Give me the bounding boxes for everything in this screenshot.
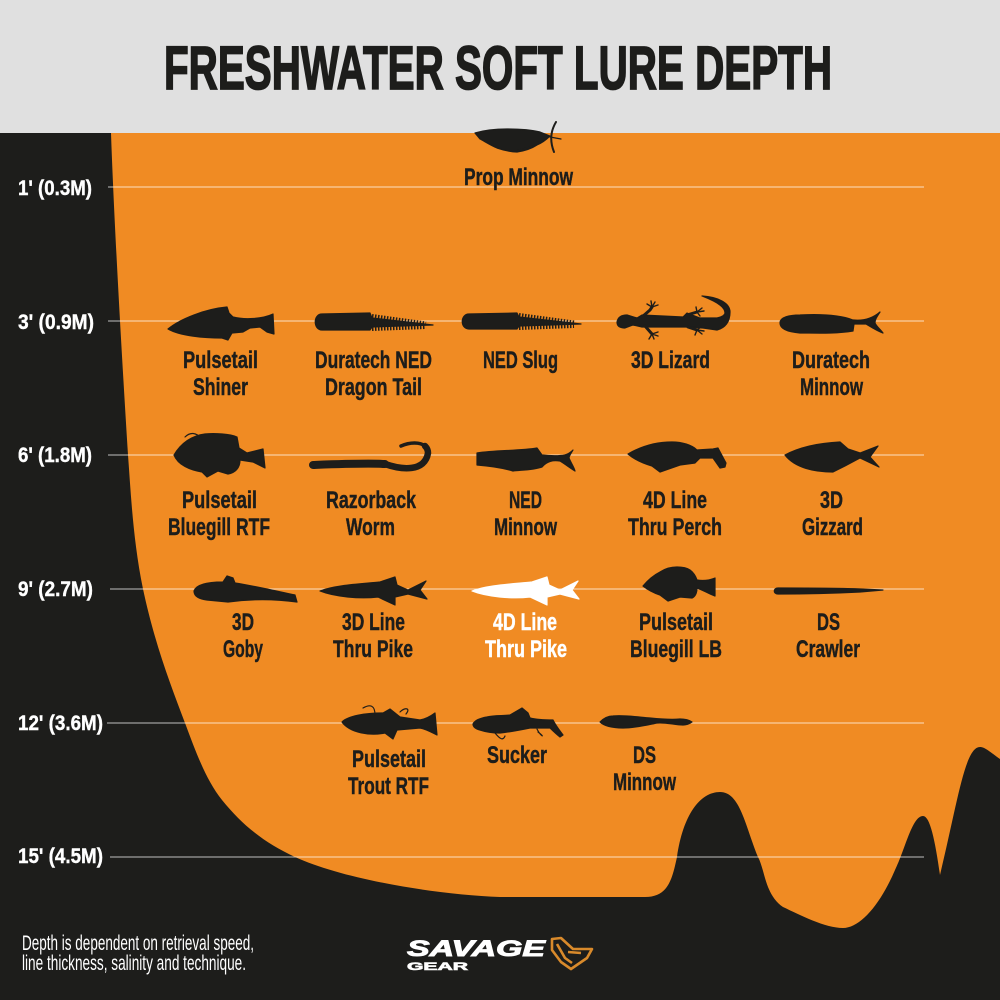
logo wordmark bbox=[407, 936, 547, 973]
label: Dragon Tail bbox=[325, 374, 422, 401]
lure: 4D Line Thru Perch bbox=[628, 442, 726, 541]
label: Pulsetail bbox=[639, 609, 713, 636]
lure: Duratech Minnow bbox=[780, 312, 883, 401]
logo: Savage Gear bbox=[407, 936, 592, 973]
depth 3 ft: 3' (0.9M) bbox=[18, 310, 94, 334]
lure: Pulsetail Shiner bbox=[168, 307, 274, 401]
label bbox=[494, 487, 557, 541]
lure: Pulsetail Trout RTF bbox=[342, 706, 437, 800]
icon: worm bbox=[313, 443, 428, 468]
label bbox=[326, 487, 416, 541]
depth 12 ft: 12' (3.6M) bbox=[18, 711, 103, 735]
label: Thru Pike bbox=[485, 636, 567, 663]
lure: 4D Line Thru Pike (highlighted) bbox=[472, 577, 579, 663]
lure: DS Minnow bbox=[600, 716, 692, 796]
icon: dragon tail bbox=[315, 313, 433, 330]
label bbox=[348, 746, 429, 800]
lure: NED Minnow bbox=[477, 448, 575, 541]
lure: 3D Gizzard bbox=[785, 442, 879, 541]
footnote bbox=[22, 932, 254, 975]
label: NED bbox=[509, 487, 542, 514]
label: 3D Line bbox=[342, 609, 405, 636]
label: Minnow bbox=[494, 514, 557, 541]
icon: prop minnow bbox=[475, 122, 561, 152]
label: Pulsetail bbox=[183, 347, 258, 374]
label: Crawler bbox=[796, 636, 860, 663]
label: Trout RTF bbox=[348, 773, 429, 800]
icon: pike bbox=[320, 577, 427, 605]
lure: Prop Minnow bbox=[464, 122, 573, 191]
footnote: line thickness, salinity and technique. bbox=[22, 952, 246, 975]
logo wordmark: GEAR bbox=[407, 961, 468, 973]
label: DS bbox=[817, 609, 840, 636]
icon: trout with hooks bbox=[342, 706, 437, 739]
label: 3D bbox=[232, 609, 254, 636]
label bbox=[223, 609, 263, 663]
depth 6 ft: 6' (1.8M) bbox=[18, 443, 92, 467]
icon: duratech minnow bbox=[780, 312, 883, 333]
label: Thru Perch bbox=[628, 514, 722, 541]
lure: NED Slug bbox=[462, 313, 581, 374]
orange water area with lake bed profile bbox=[111, 133, 1000, 928]
label: Duratech bbox=[792, 347, 870, 374]
label: 4D Line bbox=[643, 487, 707, 514]
logo emblem bbox=[552, 938, 592, 969]
label: Duratech NED bbox=[315, 347, 432, 374]
icon: lizard bbox=[617, 296, 730, 339]
icon: crawler bbox=[774, 588, 883, 594]
lure: DS Crawler bbox=[774, 588, 883, 663]
label bbox=[792, 347, 870, 401]
icon: perch bbox=[628, 442, 726, 472]
lure: 3D Goby bbox=[194, 576, 297, 663]
label: Worm bbox=[346, 514, 395, 541]
header band bbox=[0, 0, 1000, 133]
depth 15 ft: 15' (4.5M) bbox=[18, 844, 103, 868]
logo wordmark: SAVAGE bbox=[407, 936, 547, 961]
icon: sucker bbox=[473, 708, 563, 739]
label bbox=[630, 609, 722, 663]
label: 4D Line bbox=[493, 609, 557, 636]
label bbox=[485, 609, 567, 663]
label: Gizzard bbox=[802, 514, 863, 541]
label: Prop Minnow bbox=[464, 164, 573, 191]
label: Pulsetail bbox=[352, 746, 426, 773]
lure: Duratech NED Dragon Tail bbox=[315, 313, 433, 401]
label: Pulsetail bbox=[182, 487, 257, 514]
label bbox=[802, 487, 863, 541]
label: Thru Pike bbox=[333, 636, 413, 663]
icon: gizzard bbox=[785, 442, 879, 472]
lure: Sucker bbox=[473, 708, 563, 769]
label bbox=[628, 487, 722, 541]
icon: shiner bbox=[168, 307, 274, 340]
icon: NED minnow bbox=[477, 448, 575, 471]
depth 1 ft: 1' (0.3M) bbox=[18, 176, 92, 200]
label bbox=[613, 742, 676, 796]
label: Minnow bbox=[800, 374, 863, 401]
icon: bluegill with hook bbox=[174, 433, 265, 477]
lure: Razorback Worm bbox=[313, 443, 428, 541]
lure: Pulsetail Bluegill LB bbox=[630, 567, 722, 663]
depth 9 ft: 9' (2.7M) bbox=[18, 577, 93, 601]
label: Goby bbox=[223, 636, 263, 663]
label: Razorback bbox=[326, 487, 416, 514]
lure: 3D Line Thru Pike bbox=[320, 577, 427, 663]
label bbox=[168, 487, 270, 541]
label: Sucker bbox=[487, 742, 547, 769]
label bbox=[333, 609, 413, 663]
icon: NED slug bbox=[462, 313, 581, 329]
label bbox=[183, 347, 258, 401]
label: DS bbox=[633, 742, 656, 769]
depth scale bbox=[18, 176, 924, 868]
icon: goby bbox=[194, 576, 297, 602]
label: 3D Lizard bbox=[631, 347, 710, 374]
label: NED Slug bbox=[483, 347, 558, 374]
label: Bluegill RTF bbox=[168, 514, 270, 541]
icon: DS minnow bbox=[600, 716, 692, 728]
icon: white pike bbox=[472, 577, 579, 605]
label bbox=[315, 347, 432, 401]
label: Minnow bbox=[613, 769, 676, 796]
label: 3D bbox=[820, 487, 843, 514]
footnote: Depth is dependent on retrieval speed, bbox=[22, 932, 254, 955]
label bbox=[796, 609, 860, 663]
label: Bluegill LB bbox=[630, 636, 722, 663]
lure: 3D Lizard bbox=[617, 296, 730, 374]
icon: bluegill bbox=[643, 567, 715, 601]
lure: Pulsetail Bluegill RTF bbox=[168, 433, 270, 541]
label: Shiner bbox=[193, 374, 248, 401]
